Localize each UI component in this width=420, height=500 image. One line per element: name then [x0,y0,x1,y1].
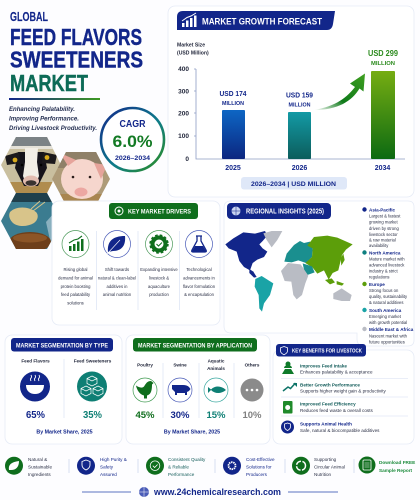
legend item: South America: South America [369,308,402,313]
title [9,9,143,100]
panel: segmentation by type [5,335,122,444]
title: MARKET [10,70,88,96]
tagline: Improving Performance. [9,116,79,122]
legend item: Europe [362,282,408,305]
driver: natural additives: additives in [107,284,128,289]
period label [241,177,347,190]
driver: natural additives: Shift towards [105,267,129,272]
driver: intensive production: Expanding intensive [140,267,178,272]
footer item: circular nutrition: Nutrition [314,472,332,477]
driver: technology [183,230,216,297]
CAGR badge: 6.0% [112,132,152,151]
driver: intensive production: livestock & [149,276,169,280]
legend item: Middle East and Africa: Nascent market with [369,334,408,338]
driver: intensive production: production [149,292,169,297]
footer item: quality: Consistent Quality [168,457,206,462]
panel: regional insights [224,201,414,346]
legend item: North America: regulations [369,275,390,280]
heading: key market drivers: KEY MARKET DRIVERS [128,208,191,216]
website link [82,487,338,497]
driver: global demand: solutions [67,300,84,306]
benefit: feed intake: Enhances palatability & acceptance [300,370,373,375]
footer item: natural and sustainable: Sustainable [28,464,52,470]
legend item: Asia-Pacific: growing market [369,220,398,225]
bar chart: USD 159 [286,90,313,100]
footer item: circular nutrition: Circular Animal [314,464,345,470]
bar chart: 0 [185,156,189,163]
heading: regional insights [227,203,331,219]
panel: key benefits [273,344,414,444]
legend item: North America: advanced livestock [369,263,405,268]
photo: piglet [52,152,110,201]
legend item: Europe: Strong focus on [369,288,399,293]
heading: segmentation by type: MARKET SEGMENTATION BY TYPE [16,342,108,349]
driver: natural additives: natural & clean-label [98,276,136,280]
tagline [9,106,97,132]
legend item: Middle East and Africa: future opportunities [369,339,405,344]
driver: global demand: protein boosting [61,284,91,289]
heading: market growth forecast [177,11,335,30]
legend item: Asia-Pacific [362,207,401,248]
legend item: Europe: Europe [369,282,385,287]
heading: key market drivers [109,203,198,219]
segment: aquatic animals: Aquatic [208,358,225,364]
benefit: feed efficiency [283,401,373,414]
title: FEED FLAVORS [10,24,142,50]
benefit: feed efficiency: Improved Feed Efficiency [300,402,356,407]
segment: aquatic animals: Animals [207,366,225,371]
segment: others [240,362,264,421]
segment: feed sweeteners: Feed Sweeteners [74,358,112,364]
footer item: quality: & Reliable [168,464,189,470]
segment: feed flavors: Feed Flavors [21,358,50,364]
segment: poultry [133,362,157,421]
panel: market growth forecast [168,6,414,197]
benefit: feed efficiency: Reduces feed waste & overall costs [300,408,373,413]
legend item: South America: with growth potential [369,320,407,325]
caption: By Market Share, 2025 [164,430,220,436]
bar chart: 200 [178,110,189,118]
bar chart: MILLION [288,102,311,108]
heading: market growth forecast: MARKET GROWTH FORECAST [202,16,322,28]
legend: regions [362,207,414,344]
benefit: animal health: Supports Animal Health [300,422,352,426]
driver: intensive production: aquaculture [148,284,171,289]
tagline: Driving Livestock Productivity. [9,125,97,132]
segment: poultry: 45% [135,410,155,421]
benefit: growth performance: Better Growth Performance [300,382,360,387]
footer item: download report: Sample Report [379,468,413,473]
driver: intensive production [140,230,178,297]
footer: value propositions [5,456,415,477]
segment: feed flavors: 65% [26,409,46,421]
arrow: growth [314,74,365,110]
panel: segmentation by application [126,335,270,444]
segment: swine: 30% [170,410,190,421]
axis title [177,42,209,56]
footer item: purity and safety: Safety [100,464,114,470]
driver: natural additives: animal nutrition [103,292,132,297]
legend item: Asia-Pacific: Largest & fastest [369,214,401,218]
footer item: cost-effective: Producers [246,472,268,477]
driver: global demand: Rising global [64,267,88,272]
legend item: Europe: & natural additives [369,300,403,305]
heading: regional insights: REGIONAL INSIGHTS (2025) [246,208,324,216]
photo: dairy cow [0,137,62,193]
segment: aquatic animals: 15% [206,410,226,421]
website link: www.24chemicalresearch.com [153,487,281,497]
footer item: purity and safety [77,457,127,477]
segment: feed flavors [20,358,50,421]
legend item: Asia-Pacific: driven by strong [369,226,399,231]
bar chart: 2026 [292,165,307,172]
benefit: feed intake: Improves Feed Intake [300,364,347,368]
tagline: Enhancing Palatability. [9,106,75,113]
legend item: Asia-Pacific: livestock sector [369,232,398,237]
period label: 2026–2034 | USD MILLION [251,181,336,188]
legend item: South America [362,308,407,325]
bar chart: 300 [178,88,189,96]
title: SWEETENERS [10,46,143,72]
caption: By Market Share, 2025 [36,430,93,436]
driver: technology: advancements in [183,276,215,280]
bar chart: USD 174 [220,89,247,98]
title: GLOBAL [10,9,48,24]
legend item: Asia-Pacific: & raw material [369,238,396,243]
segment: swine [168,362,192,421]
bar chart: 100 [178,133,189,140]
driver: global demand [58,230,93,306]
segment: swine: Swine [173,362,187,368]
footer item: cost-effective [223,457,275,477]
footer item: natural and sustainable: Ingredients [28,472,51,477]
legend item: Middle East and Africa: Middle East & Africa [369,327,414,332]
footer item: natural and sustainable: Natural & [28,457,47,462]
footer item: natural and sustainable [5,457,52,477]
benefit: growth performance: Supports higher weight gain & productivity [300,389,387,394]
footer item: cost-effective: Cost-Effective [246,457,275,462]
bar chart: 2025 [225,165,241,172]
legend item: Asia-Pacific: availability [369,243,389,248]
segment: others: Others [245,362,260,368]
axis title: (USD Million) [177,50,209,56]
bar chart [178,49,405,172]
driver: global demand: demand for animal [58,276,93,280]
segment: feed sweeteners: 35% [83,409,103,421]
bar chart: MILLION [371,61,395,67]
benefit: feed intake [282,362,373,375]
axis title: Market Size [177,42,205,48]
CAGR badge [101,108,164,171]
legend item: South America: Emerging market [369,314,402,319]
driver: technology: & encapsulation [184,292,215,297]
segment: others: 10% [242,410,262,421]
legend item: Europe: quality, sustainability [369,294,408,299]
panel: key market drivers [52,201,220,325]
footer item: download report [358,456,415,474]
legend item: Asia-Pacific: Asia-Pacific [369,207,395,212]
driver: technology: Technological [186,267,212,272]
segment: aquatic animals [204,358,228,421]
footer item: quality [146,457,206,477]
driver: technology: flavor formulation [183,284,216,289]
footer item: quality: Performance [168,472,195,477]
legend item: North America: North America [369,250,401,256]
legend item: Middle East and Africa [362,327,414,344]
heading: key benefits: KEY BENEFITS FOR LIVESTOCK [292,348,362,354]
bar chart: MILLION [222,101,244,107]
bar chart: 400 [178,66,189,73]
footer item: purity and safety: High Purity & [100,457,127,462]
world map [225,231,353,312]
benefit: animal health [281,420,380,434]
benefit: growth performance [283,382,387,394]
bar chart: USD 299 [368,49,399,58]
legend item: North America: industry & strict [369,269,398,274]
segment: feed sweeteners [74,358,112,421]
benefit: animal health: Safe, natural & biocompatible additives [300,428,380,433]
CAGR badge: 2026–2034 [115,155,150,162]
photo: shrimp with feed pellets [1,193,53,249]
segment: poultry: Poultry [137,362,153,368]
footer item: download report: Download FREE [379,460,415,465]
heading: segmentation by application [133,338,257,352]
legend item: North America: Mature market with [369,257,405,262]
legend item: North America [362,250,405,280]
footer item: circular nutrition [292,457,345,477]
heading: segmentation by application: MARKET SEGMENTATION BY APPLICATION [138,342,252,349]
footer item: cost-effective: Solutions for [246,464,272,470]
heading: key benefits [276,344,366,356]
bar chart: 2034 [375,165,390,172]
footer item: purity and safety: Assured [100,472,117,477]
driver: global demand: feed palatability [61,292,91,297]
CAGR badge: CAGR [120,119,146,130]
footer item: circular nutrition: Supporting [314,457,337,462]
driver: natural additives [98,230,136,297]
